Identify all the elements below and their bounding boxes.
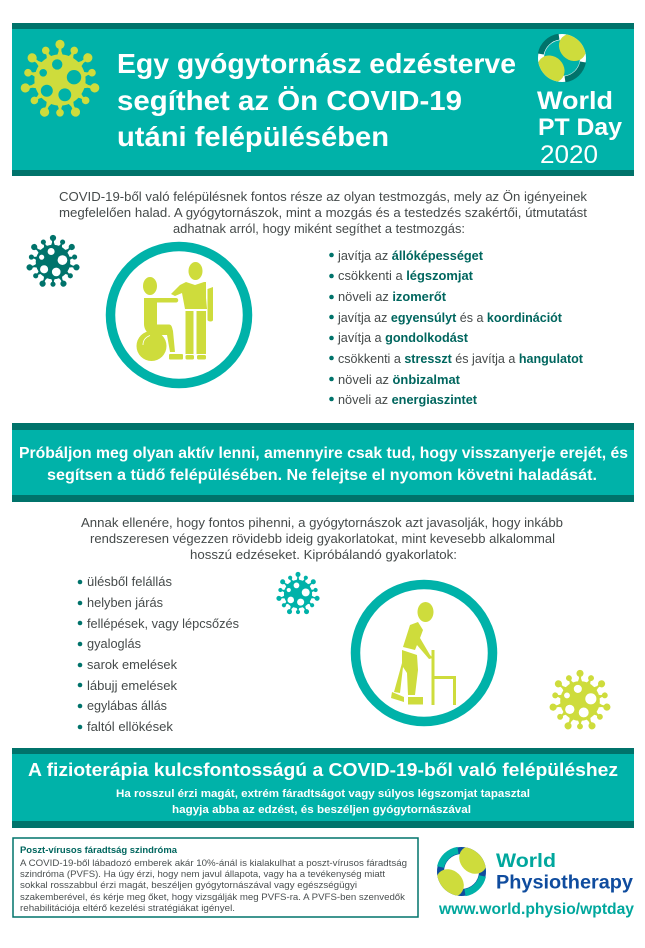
- list: benefits of exercise: növeli az izomerőt: [338, 289, 447, 304]
- callout: post-viral fatigue syndrome: sokkal rosszabbul érzi magát, beszéljen gyógytornászával vagy egészségügyi: [20, 880, 357, 891]
- icon: lime virus lower right: [549, 670, 611, 731]
- logo: World PT Day 2020: World: [537, 87, 613, 115]
- icon: physiotherapist with patient on ball: [110, 246, 248, 384]
- banner: stay active: segítsen a tüdő felépülésében. Ne felejtse el nyomon követni haladását.: [47, 467, 597, 484]
- list: benefits of exercise: javítja az állóképességet: [337, 248, 484, 263]
- second paragraph: Annak ellenére, hogy fontos pihenni, a gyógytornászok azt javasolják, hogy inkább: [81, 515, 563, 530]
- logo: World PT Day 2020: PT Day: [538, 114, 622, 141]
- list: benefits of exercise: [329, 248, 584, 407]
- callout: post-viral fatigue syndrome: szakemberével, és kérje meg őket, hogy vizsgálják meg PVFS-ra. A PVFS-ben szenvedők: [20, 892, 405, 903]
- intro paragraph: COVID-19-ből való felépülésnek fontos része az olyan testmozgás, mely az Ön igényeinek: [59, 189, 588, 204]
- list: benefits of exercise: csökkenti a légszomjat: [338, 268, 474, 283]
- logo: World Physiotherapy: Physiotherapy: [496, 872, 633, 894]
- icon: lime virus in header: [20, 40, 100, 118]
- banner: stay active: [12, 423, 634, 502]
- callout: post-viral fatigue syndrome: [13, 838, 418, 917]
- banner: physiotherapy is key: Ha rosszul érzi magát, extrém fáradtságot vagy súlyos légszomjat tapasztal: [116, 788, 530, 800]
- banner: physiotherapy is key: [12, 748, 634, 828]
- icon: dark teal virus: [26, 235, 80, 288]
- second paragraph: hosszú edzéseket. Kipróbálandó gyakorlatok:: [190, 547, 457, 562]
- intro paragraph: megfelelően halad. A gyógytornászok, mint a mozgás és a testedzés szakértői, útmutatást: [59, 205, 587, 220]
- callout: post-viral fatigue syndrome: szindróma (PVFS). Ha úgy érzi, hogy nem javul állapota, vagy ha a tevékenység miatt: [20, 869, 385, 880]
- callout: post-viral fatigue syndrome: A COVID-19-ből lábadozó emberek akár 10%-ánál is kialakulhat a poszt-vírusos fáradtság: [20, 858, 407, 869]
- list: exercises to try: helyben járás: [87, 595, 163, 610]
- header banner: [12, 23, 634, 176]
- icon: teal virus: [276, 572, 320, 615]
- banner: physiotherapy is key: hagyja abba az edzést, és beszéljen gyógytornászával: [172, 804, 471, 816]
- list: exercises to try: lábujj emelések: [87, 678, 177, 693]
- list: exercises to try: faltól ellökések: [87, 719, 173, 734]
- title: utáni felépülésében: [117, 121, 389, 152]
- second paragraph: rendszeresen végezzen rövidebb ideig gyakorlatokat, mint kevesebb alkalommal: [90, 531, 555, 546]
- list: exercises to try: gyaloglás: [87, 636, 141, 651]
- list: exercises to try: sarok emelések: [87, 657, 177, 672]
- logo: World Physiotherapy: www.world.physio/wptday: [438, 901, 634, 918]
- banner: stay active: Próbáljon meg olyan aktív lenni, amennyire csak tud, hogy visszanyerje erejét, és: [19, 445, 628, 462]
- second paragraph: [81, 515, 563, 562]
- title: segíthet az Ön COVID-19: [117, 85, 462, 116]
- logo: World Physiotherapy: World: [496, 851, 556, 872]
- list: benefits of exercise: javítja az egyensúlyt és a koordinációt: [337, 310, 563, 325]
- intro paragraph: [59, 189, 588, 236]
- list: exercises to try: egylábas állás: [87, 698, 167, 713]
- logo: World Physiotherapy: [437, 846, 634, 918]
- logo: World PT Day 2020: [537, 34, 622, 163]
- intro paragraph: adhatnak arról, hogy miként segíthet a testmozgás:: [173, 221, 465, 236]
- callout: post-viral fatigue syndrome: Poszt-vírusos fáradtság szindróma: [20, 845, 178, 856]
- list: exercises to try: [78, 574, 239, 734]
- list: benefits of exercise: javítja a gondolkodást: [337, 330, 469, 345]
- list: benefits of exercise: csökkenti a stresszt és javítja a hangulatot: [338, 351, 584, 366]
- list: exercises to try: ülésből felállás: [87, 574, 172, 589]
- list: exercises to try: fellépések, vagy lépcsőzés: [87, 616, 239, 631]
- callout: post-viral fatigue syndrome: rehabilitációja eltérő kezelési stratégiákat igényel.: [20, 903, 235, 914]
- title: [117, 48, 516, 152]
- title: Egy gyógytornász edzésterve: [117, 48, 516, 79]
- banner: physiotherapy is key: A fizioterápia kulcsfontosságú a COVID-19-ből való felépüléshez: [28, 760, 618, 780]
- list: benefits of exercise: növeli az önbizalmat: [338, 372, 461, 387]
- icon: person with chair: [356, 584, 492, 722]
- list: benefits of exercise: növeli az energiaszintet: [338, 392, 478, 407]
- logo: World PT Day 2020: 2020: [540, 141, 598, 169]
